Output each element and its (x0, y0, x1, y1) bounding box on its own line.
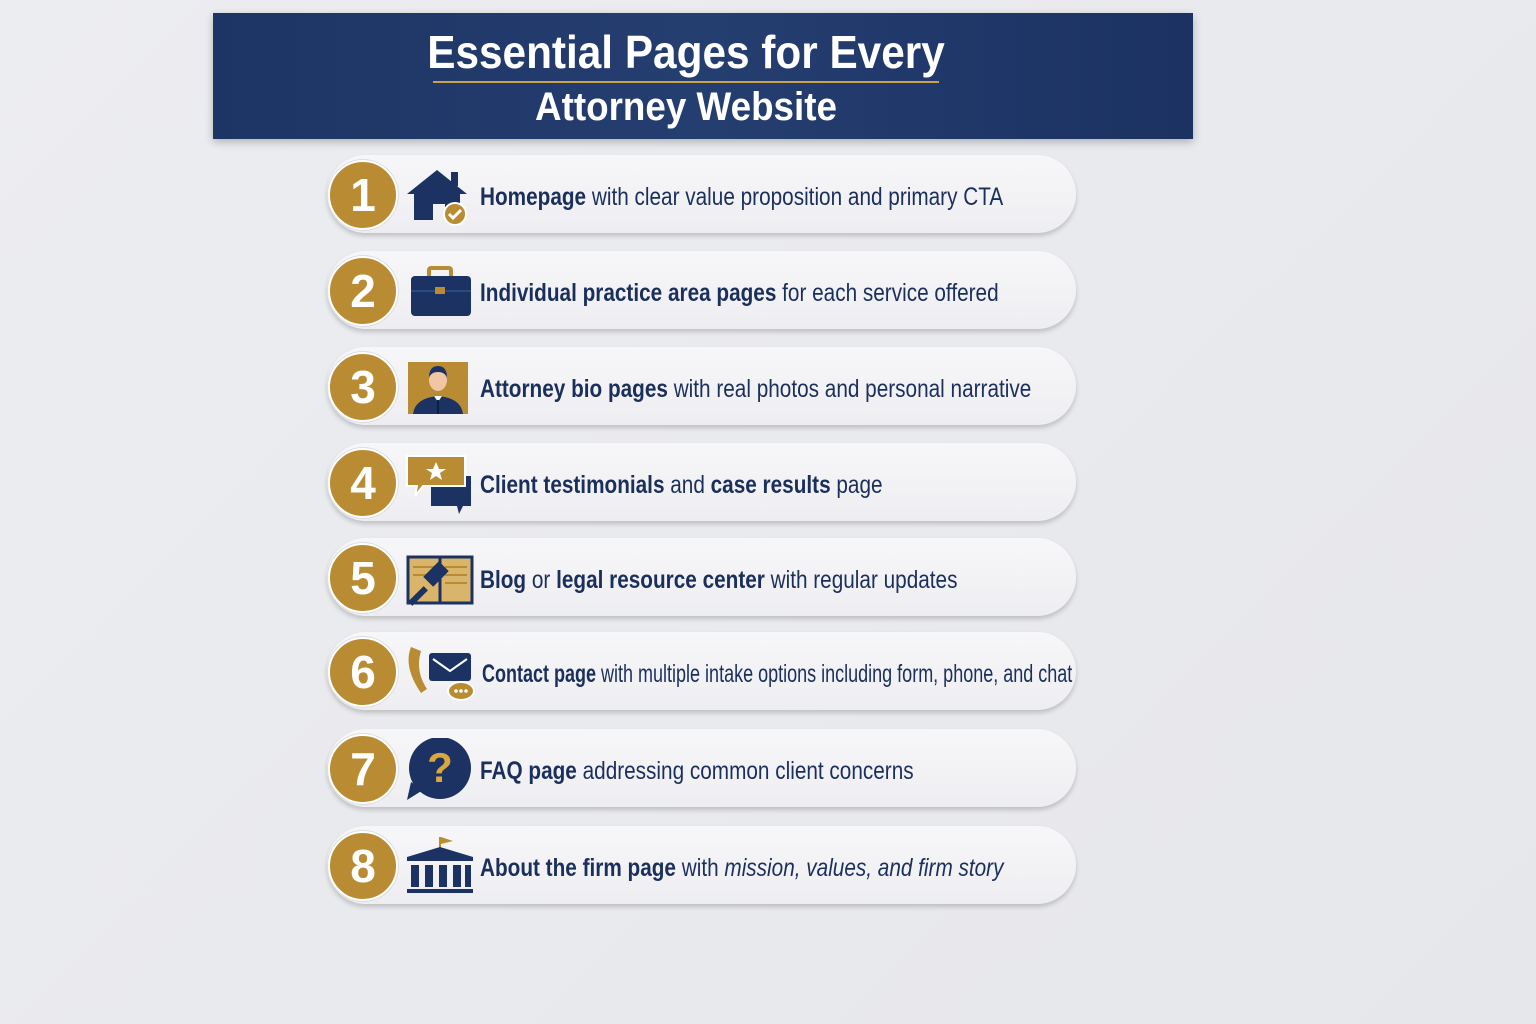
text 2: Individual practice area pages for each service offered (480, 279, 999, 307)
row 7 (327, 729, 1076, 807)
icon: FAQ bubble (407, 738, 471, 800)
number 7 (328, 734, 398, 804)
number 2: 2 (350, 265, 376, 317)
number 5: 5 (350, 552, 376, 604)
text 5: Blog or legal resource center with regular updates (480, 566, 957, 594)
number 6: 6 (350, 646, 376, 698)
row 5 (327, 538, 1076, 616)
icon: house (407, 170, 467, 226)
text 8: About the firm page with mission, values, and firm story (480, 854, 1003, 882)
number 2 (328, 256, 398, 326)
icon: courthouse (407, 837, 473, 893)
number 4: 4 (350, 457, 376, 509)
number 3 (328, 352, 398, 422)
number 8 (328, 831, 398, 901)
number 1 (328, 160, 398, 230)
icon: testimonial bubbles (406, 455, 471, 514)
icon: book and gavel (406, 556, 474, 606)
row 6 (327, 632, 1076, 710)
number 5 (328, 543, 398, 613)
text 7: FAQ page addressing common client concerns (480, 757, 914, 785)
number 4 (328, 448, 398, 518)
number 7: 7 (350, 743, 376, 795)
row 1 (327, 155, 1076, 233)
number 3: 3 (350, 361, 376, 413)
row 4 (327, 443, 1076, 521)
text 4: Client testimonials and case results page (480, 471, 883, 499)
title line 1: Essential Pages for Every (427, 26, 945, 78)
icon: briefcase (411, 266, 471, 316)
title line 2: Attorney Website (535, 85, 837, 129)
header (213, 13, 1193, 139)
number 8: 8 (350, 840, 376, 892)
icon: phone and mail (408, 647, 475, 701)
text 1: Homepage with clear value proposition and primary CTA (480, 183, 1003, 211)
row 8 (327, 826, 1076, 904)
text 3: Attorney bio pages with real photos and personal narrative (480, 375, 1031, 403)
number 6 (328, 637, 398, 707)
icon: FAQ bubble: ? (427, 744, 453, 791)
text 6: Contact page with multiple intake options including form, phone, and chat (482, 660, 1072, 688)
icon: attorney photo (408, 362, 468, 414)
row 3 (327, 347, 1076, 425)
row 2 (327, 251, 1076, 329)
number 1: 1 (350, 169, 376, 221)
